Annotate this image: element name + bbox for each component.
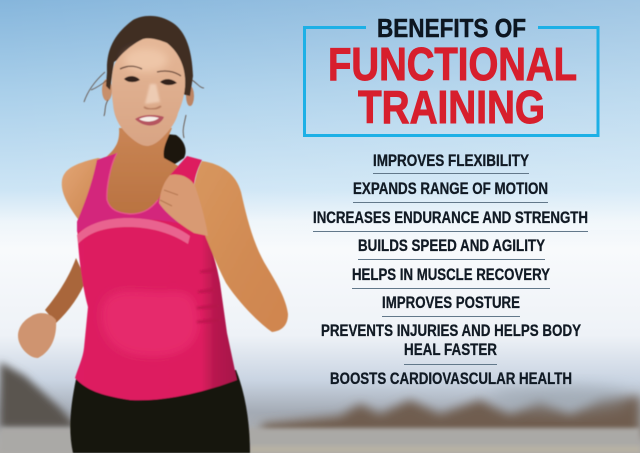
fingers: [160, 190, 178, 206]
title line: benefits of: BENEFITS OF: [377, 15, 526, 43]
benefits list: [313, 152, 588, 388]
hair: [106, 16, 193, 96]
eyebrows: [120, 66, 181, 76]
nostrils: [144, 106, 161, 109]
face: [112, 38, 185, 146]
item: builds speed and agility: BUILDS SPEED AND AGILITY: [358, 237, 545, 255]
title line: functional: FUNCTIONAL: [328, 38, 577, 90]
ponytail: [156, 134, 186, 166]
item: improves posture: [382, 294, 520, 316]
left fist: [18, 313, 56, 358]
tank highlight: [102, 291, 198, 356]
fist: [159, 174, 208, 236]
far arm: [45, 258, 86, 323]
item: boosts cardiovascular health: BOOSTS CARDIOVASCULAR HEALTH: [330, 370, 572, 388]
shorts: [70, 370, 250, 453]
ear left: [102, 79, 112, 101]
item: prevents injuries and helps body heal faster: PREVENTS INJURIES AND HELPS BODY: [321, 322, 581, 340]
neckline trim: [107, 153, 158, 214]
title line: training: TRAINING: [358, 81, 545, 133]
eyes: [124, 76, 177, 85]
item: improves posture: IMPROVES POSTURE: [382, 294, 520, 312]
item: expands range of motion: EXPANDS RANGE OF MOTION: [353, 180, 548, 198]
stray hair: [84, 72, 204, 138]
ear right: [186, 86, 194, 106]
mouth: [135, 115, 164, 126]
tank upper panel: [77, 153, 186, 232]
item: prevents injuries and helps body heal faster: [321, 322, 581, 364]
tank chest band: [77, 218, 190, 244]
title box: [304, 15, 598, 136]
near arm: [192, 161, 288, 332]
tank side gathers: [197, 270, 220, 322]
item: prevents injuries and helps body heal faster: HEAL FASTER: [404, 341, 497, 359]
tank top: [75, 153, 237, 400]
forehead highlight: [124, 48, 168, 72]
item: improves flexibility: IMPROVES FLEXIBILITY: [373, 152, 529, 170]
nose: [145, 84, 160, 104]
item: helps in muscle recovery: HELPS IN MUSCLE RECOVERY: [352, 266, 550, 284]
neck and chest: [100, 128, 182, 222]
left shoulder: [62, 158, 108, 222]
runner photo illustration: [18, 16, 288, 453]
